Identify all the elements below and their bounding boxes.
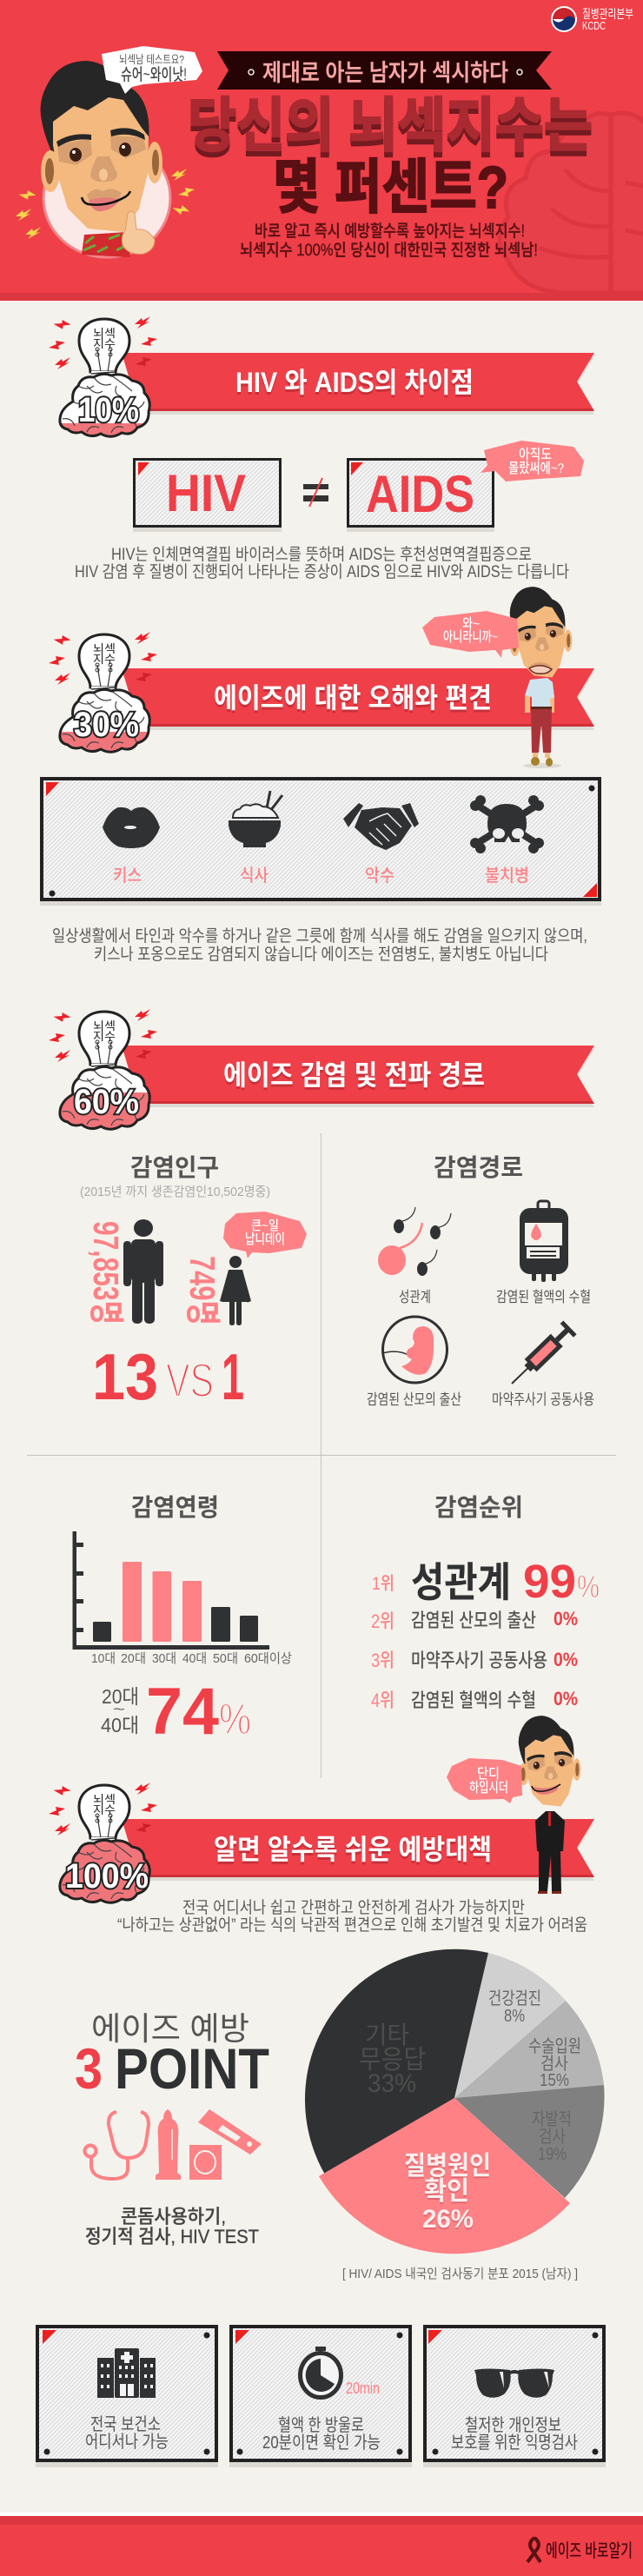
- panel: infection routes: 감염경로: [434, 1154, 523, 1181]
- icon: blood bag: 감염된 혈액의 수혈: [496, 1289, 591, 1305]
- icon: brain bulb 10%: 지수: [93, 337, 116, 350]
- section heading: 에이즈 감염 및 전파 경로: [122, 1046, 594, 1107]
- panel: 3 point prevention: 콘돔사용하기,: [121, 2206, 226, 2227]
- bar chart: 50대: [213, 1651, 238, 1666]
- icon: lips: [103, 807, 160, 886]
- icon: sperm: 성관계: [399, 1289, 431, 1305]
- panel: infected population: [80, 1154, 307, 1413]
- rank 1: 99: [523, 1556, 576, 1608]
- icon: stethoscope: [85, 2112, 149, 2179]
- pie label: 자발적 검사 19%: [532, 2109, 572, 2164]
- speech bubble: 단디 하입시더: 단디: [477, 1766, 500, 1782]
- icon: brain bulb 30%: 지수: [93, 653, 116, 666]
- paragraph: misconceptions: [52, 926, 587, 964]
- bar chart: 40대: [182, 1651, 207, 1666]
- card: 20 minute test: [229, 2327, 412, 2467]
- header subtitle: [240, 222, 538, 260]
- not equal sign: [303, 478, 328, 507]
- rank 2: 0%: [554, 1608, 578, 1630]
- pie label: 기타 무응답 33%: 무응답: [359, 2046, 426, 2075]
- pie label: 건강검진 8%: [488, 1988, 541, 2026]
- pie label: 수술입원 검사 15%: 수술입원: [528, 2036, 581, 2056]
- rank 1: [372, 1556, 600, 1608]
- icon: brain bulb 10%: 10%: [78, 391, 139, 429]
- paragraph: prevention: [117, 1898, 587, 1935]
- rank 4: 감염된 혈액의 수혈: [411, 1690, 536, 1711]
- rank 3: 0%: [554, 1649, 578, 1670]
- man character: oval portrait: [16, 61, 195, 257]
- pie label: 질병원인 확인 26%: 질병원인: [404, 2152, 491, 2181]
- icon: brain bulb 10%: [49, 316, 157, 449]
- pie label: 건강검진 8%: 8%: [504, 2007, 525, 2026]
- rank 2: 2위: [371, 1610, 394, 1632]
- icon: sunglasses: [474, 2369, 554, 2398]
- rank 2: 감염된 산모의 출산: [411, 1610, 536, 1631]
- logo: KCDC: [551, 6, 633, 32]
- man character: suit: [519, 1716, 580, 1894]
- icon: brain bulb 30%: 뇌섹: [93, 642, 116, 655]
- stat: 20대~40대 74%: %: [219, 1695, 251, 1743]
- pie label: 질병원인 확인 26%: 확인: [424, 2179, 469, 2208]
- section heading: HIV 와 AIDS의 차이점: [122, 353, 594, 415]
- stat: 13 VS 1: 13: [92, 1340, 158, 1413]
- rank 4: 0%: [554, 1688, 578, 1710]
- pie label: 수술입원 검사 15%: 15%: [540, 2071, 569, 2090]
- icon: woman: [220, 1256, 251, 1325]
- icon: sperm: [378, 1207, 451, 1305]
- pie label: 자발적 검사 19%: 검사: [539, 2127, 566, 2147]
- rank 3: 3위: [371, 1650, 394, 1671]
- panel: misconceptions icons: [40, 779, 601, 906]
- AIDS box: AIDS: [366, 465, 474, 523]
- section heading: 알면 알수록 쉬운 예방대책: 알면 알수록 쉬운 예방대책: [214, 1836, 492, 1868]
- section heading: 알면 알수록 쉬운 예방대책: 알면 알수록 쉬운 예방대책: [214, 1834, 492, 1865]
- card: 20 minute test: 20min: [346, 2380, 380, 2397]
- card: 20 minute test: 20분이면 확인 가능: [262, 2433, 381, 2453]
- icon: brain bulb 60%: [49, 1009, 157, 1131]
- section 3: infection and transmission: [27, 1009, 616, 1778]
- rank 1: 1위: [372, 1574, 394, 1594]
- icon: hospital: [97, 2348, 156, 2398]
- panel: 3 point prevention: 정기적 검사, HIV TEST: [85, 2226, 259, 2247]
- icon: handshake: [343, 803, 419, 886]
- pie label: 자발적 검사 19%: 19%: [538, 2145, 567, 2164]
- pie label: 질병원인 확인 26%: 질병원인: [404, 2154, 491, 2182]
- pie label: 질병원인 확인 26%: 확인: [424, 2177, 469, 2206]
- section heading: 에이즈에 대한 오해와 편견: 에이즈에 대한 오해와 편견: [214, 682, 492, 714]
- panel: infection routes: [367, 1154, 594, 1408]
- main title: 당신의 뇌섹지수는: [188, 98, 593, 164]
- speech bubble: 단디 하입시더: 하입시더: [469, 1780, 508, 1796]
- panel: 3 point prevention: 3: [75, 2036, 103, 2101]
- header subtitle: 바로 알고 즉시 예방할수록 높아지는 뇌섹지수!: [255, 222, 525, 241]
- icon: brain bulb 100%: 100%: [65, 1857, 149, 1895]
- icon: test kit: [198, 2109, 262, 2154]
- icon: fetus: [367, 1317, 461, 1408]
- card: health center: [36, 2327, 218, 2467]
- header panel: [0, 0, 643, 301]
- icon: lips: 키스: [113, 866, 142, 886]
- rank 1: %: [577, 1569, 600, 1604]
- icon: brain bulb 30%: 30%: [74, 706, 139, 744]
- icon: brain bulb 30%: [49, 632, 157, 767]
- section heading: HIV 와 AIDS의 차이점: HIV 와 AIDS의 차이점: [235, 367, 474, 398]
- stat: 20대~40대 74%: 20대: [102, 1685, 139, 1708]
- icon: AIDS ribbon: [527, 2538, 540, 2562]
- icon: brain bulb 10%: 뇌섹: [93, 327, 116, 340]
- main title: 당신의 뇌섹지수는: [188, 93, 593, 159]
- icon: rice bowl: 식사: [240, 866, 268, 886]
- header subtitle: 뇌섹지수 100%인 당신이 대한민국 진정한 뇌섹남!: [240, 241, 538, 260]
- icon: syringe: [492, 1320, 594, 1408]
- title ribbon: [217, 51, 552, 90]
- icon: man: [123, 1219, 163, 1324]
- rank 4: [371, 1688, 578, 1711]
- section 4: prevention: [49, 1716, 605, 2281]
- pie label: 수술입원 검사 15%: [528, 2036, 581, 2090]
- icon: condom pack: [189, 2145, 222, 2180]
- speech bubble: 단디 하입시더: [447, 1758, 522, 1803]
- panel: 3 point prevention: [75, 2011, 269, 2247]
- pie label: 기타 무응답 33%: 기타: [365, 2022, 409, 2048]
- speech bubble: header: 뇌섹남 테스트요?: [119, 53, 184, 66]
- panel: infected population: 감염인구: [130, 1154, 219, 1181]
- speech bubble: 아직도 몰랐써에: 몰랐써에~?: [508, 461, 564, 476]
- pie label: 자발적 검사 19%: 자발적: [532, 2109, 572, 2129]
- panel: infected population: 97,853명: [86, 1221, 126, 1325]
- stat: 20대~40대 74%: 74: [146, 1675, 219, 1749]
- pie label: 질병원인 확인 26%: 26%: [422, 2205, 474, 2234]
- speech bubble: 와~ 아니라니까~: [422, 611, 519, 658]
- brain watermark: [500, 113, 643, 293]
- main title: 당신의 뇌섹지수는: [188, 96, 593, 162]
- pie chart: [305, 1949, 605, 2254]
- HIV box: HIV: [166, 464, 246, 522]
- icon: stopwatch: [301, 2347, 341, 2397]
- icon: brain bulb 60%: 뇌섹: [93, 1019, 116, 1032]
- stat: 13 VS 1: [92, 1340, 244, 1413]
- section heading: HIV 와 AIDS의 차이점: HIV 와 AIDS의 차이점: [235, 369, 474, 401]
- man character: casual: [510, 587, 572, 768]
- pie label: 기타 무응답 33%: 33%: [368, 2069, 416, 2098]
- panel: infection age: [73, 1494, 292, 1749]
- bar chart: [73, 1531, 292, 1666]
- bar chart: 30대: [152, 1651, 176, 1666]
- speech bubble: 큰~일 납니데이: 큰~일: [251, 1218, 279, 1233]
- section 1: HIV vs AIDS: [49, 316, 594, 581]
- icon: brain bulb 60%: 지수: [93, 1030, 116, 1043]
- rank 4: 4위: [371, 1690, 394, 1711]
- card: anonymous test: 철저한 개인정보: [465, 2415, 561, 2435]
- pie label: 건강검진 8%: 건강검진: [488, 1988, 541, 2008]
- rank 1: 성관계: [411, 1559, 511, 1605]
- paragraph: HIV AIDS difference: [75, 545, 569, 581]
- card: anonymous test: 보호를 위한 익명검사: [451, 2433, 578, 2453]
- bar chart: 20대: [121, 1651, 146, 1666]
- section heading: 에이즈 감염 및 전파 경로: 에이즈 감염 및 전파 경로: [223, 1062, 485, 1093]
- icon: blood bag: [496, 1201, 591, 1305]
- stat: 20대~40대 74%: [101, 1675, 251, 1749]
- AIDS box: [347, 459, 494, 532]
- paragraph: HIV AIDS difference: HIV는 인체면역결핍 바이러스를 뜻하며 AIDS는 후천성면역결핍증으로: [111, 545, 532, 564]
- footer: [0, 2513, 643, 2576]
- panel: infection ranking: [371, 1494, 600, 1711]
- section heading: 알면 알수록 쉬운 예방대책: [122, 1819, 594, 1881]
- paragraph: misconceptions: 키스나 포옹으로도 감염되지 않습니다 에이즈는 전염병도, 불치병도 아닙니다: [94, 945, 548, 964]
- paragraph: HIV AIDS difference: HIV 감염 후 질병이 진행되어 나타나는 증상이 AIDS 임으로 HIV와 AIDS는 다릅니다: [75, 562, 569, 581]
- speech bubble: 큰~일 납니데이: 납니데이: [245, 1232, 285, 1247]
- panel: 3 point prevention: 에이즈 예방: [91, 2011, 249, 2047]
- pie label: 수술입원 검사 15%: 검사: [540, 2054, 568, 2074]
- paragraph: prevention: 전국 어디서나 쉽고 간편하고 안전하게 검사가 가능하지만: [182, 1898, 525, 1917]
- card: anonymous test: [423, 2327, 606, 2467]
- main title: [188, 93, 593, 221]
- speech bubble: 와~ 아니라니까~: 와~: [462, 616, 480, 632]
- icon: skull and crossbones: [470, 795, 544, 886]
- panel: infected population: 749명: [182, 1256, 222, 1325]
- section heading: 에이즈 감염 및 전파 경로: 에이즈 감염 및 전파 경로: [223, 1059, 485, 1091]
- icon: rice bowl: [229, 791, 282, 886]
- stat: 13 VS 1: VS: [166, 1353, 214, 1407]
- icon: fetus: 감염된 산모의 출산: [367, 1391, 461, 1408]
- stat: 20대~40대 74%: 40대: [101, 1714, 139, 1736]
- title ribbon: 제대로 아는 남자가 섹시하다: [262, 60, 508, 86]
- section 2: misconceptions: [40, 587, 601, 964]
- panel: 3 point prevention: POINT: [115, 2036, 269, 2101]
- speech bubble: 큰~일 납니데이: [223, 1212, 307, 1258]
- card: health center: 전국 보건소: [90, 2414, 161, 2434]
- icon: handshake: 악수: [365, 866, 394, 886]
- bar chart: 60대이상: [244, 1651, 292, 1666]
- icon: brain bulb 100%: 뇌섹: [93, 1793, 116, 1806]
- rank 3: 마약주사기 공동사용: [411, 1650, 547, 1671]
- icon: brain bulb 60%: 60%: [74, 1083, 139, 1121]
- rank 2: [371, 1608, 578, 1632]
- section heading: 에이즈에 대한 오해와 편견: 에이즈에 대한 오해와 편견: [214, 685, 492, 716]
- HIV box: [133, 459, 282, 532]
- pie source caption: [ HIV/ AIDS 내국인 검사동기 분포 2015 (남자) ]: [342, 2267, 578, 2281]
- card: health center: 어디서나 가능: [85, 2432, 169, 2452]
- icon: brain bulb 100%: 지수: [93, 1803, 116, 1816]
- speech bubble: header: 슈어~와이낫!: [121, 65, 187, 84]
- pie label: 기타 무응답 33%: [359, 2022, 426, 2098]
- speech bubble: 아직도 몰랐써에: 아직도: [519, 447, 552, 462]
- pie label: 질병원인 확인 26%: [404, 2152, 491, 2235]
- panel: infection ranking: 감염순위: [434, 1494, 523, 1521]
- icon: condom tube: [156, 2109, 181, 2180]
- panel: infection age: 감염연령: [131, 1494, 219, 1521]
- speech bubble: 아직도 몰랐써에: [481, 441, 584, 481]
- bar chart: 10대: [91, 1651, 116, 1666]
- speech bubble: 와~ 아니라니까~: 아니라니까~: [443, 629, 498, 645]
- panel: infected population: (2015년 까지 생존감염인10,502명중): [80, 1185, 270, 1199]
- section heading: 에이즈에 대한 오해와 편견: [122, 668, 594, 730]
- speech bubble: header: [102, 46, 202, 94]
- pie label: 질병원인 확인 26%: 26%: [422, 2207, 474, 2235]
- logo: KCDC: KCDC: [582, 19, 606, 32]
- stat: 20대~40대 74%: ~: [113, 1703, 125, 1717]
- card: 20 minute test: 혈액 한 방울로: [278, 2415, 364, 2435]
- icon: skull and crossbones: 불치병: [485, 866, 529, 886]
- main title: 몇 퍼센트?: [273, 155, 508, 221]
- icon: brain bulb 100%: [49, 1783, 157, 1902]
- icon: syringe: 마약주사기 공동사용: [492, 1391, 594, 1408]
- stat: 13 VS 1: 1: [222, 1340, 244, 1413]
